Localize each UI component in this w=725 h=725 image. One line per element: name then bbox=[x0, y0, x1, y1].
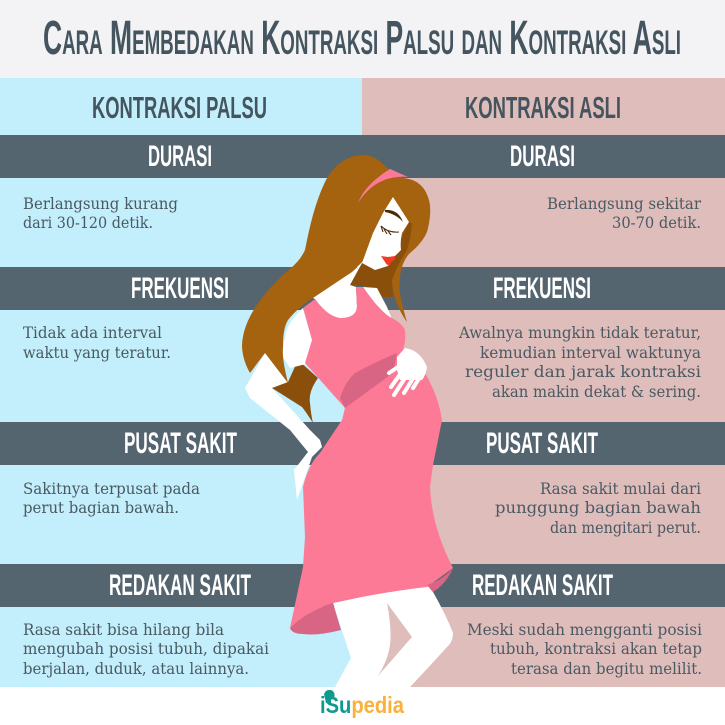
gap between legs bbox=[378, 603, 412, 676]
section band: redakan sakit: REDAKAN SAKIT bbox=[472, 569, 613, 602]
section band: redakan sakit bbox=[0, 564, 725, 607]
text: asli pusat sakit: dan mengitari perut. bbox=[550, 519, 701, 537]
text: asli pusat sakit bbox=[495, 480, 701, 537]
dress hem shadow left bbox=[290, 603, 341, 634]
section band: pusat sakit: PUSAT SAKIT bbox=[124, 427, 237, 460]
dress bbox=[290, 287, 453, 628]
text: asli pusat sakit: punggung bagian bawah bbox=[495, 499, 701, 517]
text: asli redakan sakit bbox=[467, 621, 702, 678]
section band: frekuensi: FREKUENSI bbox=[131, 272, 229, 305]
face bbox=[362, 197, 409, 270]
legs bbox=[333, 585, 453, 687]
panel: kontraksi palsu background bbox=[0, 78, 362, 687]
section band: pusat sakit: PUSAT SAKIT bbox=[486, 427, 598, 460]
text: asli frekuensi bbox=[458, 324, 701, 401]
lower left arm and hand bbox=[245, 353, 322, 500]
text: palsu pusat sakit: perut bagian bawah. bbox=[23, 499, 179, 517]
panel: kontraksi asli background bbox=[362, 78, 725, 687]
text: palsu pusat sakit bbox=[23, 480, 200, 517]
text: asli frekuensi: Awalnya mungkin tidak teratur, bbox=[458, 324, 701, 342]
text: palsu redakan sakit: Rasa sakit bisa hilang bila bbox=[23, 621, 224, 639]
dark sleeve hair bbox=[272, 360, 318, 423]
illustration: pregnant woman bbox=[242, 155, 453, 687]
section band: durasi: DURASI bbox=[148, 140, 212, 173]
text: asli durasi bbox=[547, 195, 702, 232]
logo: isupedia bbox=[320, 690, 404, 718]
text: asli redakan sakit: Meski sudah mengganti posisi bbox=[467, 621, 702, 639]
long hair bbox=[242, 155, 430, 383]
right chest skin bbox=[363, 287, 392, 319]
text: palsu redakan sakit: berjalan, duduk, atau lainnya. bbox=[23, 660, 249, 678]
text: asli durasi: Berlangsung sekitar bbox=[547, 195, 702, 213]
text: asli durasi: 30-70 detik. bbox=[612, 214, 701, 232]
section band: frekuensi: FREKUENSI bbox=[493, 272, 591, 305]
dress hem shadow right bbox=[427, 568, 453, 592]
eyebrow bbox=[385, 210, 403, 222]
lips bbox=[381, 256, 395, 265]
eyelash bbox=[381, 226, 399, 235]
text: asli frekuensi: kemudian interval waktunya bbox=[480, 344, 701, 362]
text: palsu frekuensi bbox=[23, 324, 171, 362]
section band: durasi bbox=[0, 135, 725, 178]
text: palsu redakan sakit: mengubah posisi tubuh, dipakai bbox=[23, 640, 269, 658]
hand on belly bbox=[389, 348, 427, 395]
text: asli frekuensi: akan makin dekat & sering. bbox=[492, 383, 701, 401]
column heading: kontraksi palsu: KONTRAKSI PALSU bbox=[92, 90, 267, 125]
text: asli frekuensi: reguler dan jarak kontraksi bbox=[465, 363, 701, 381]
shoulder bbox=[283, 308, 312, 368]
text: palsu frekuensi: waktu yang teratur. bbox=[23, 344, 171, 362]
section band: durasi: DURASI bbox=[510, 140, 575, 173]
text: palsu durasi: dari 30-120 detik. bbox=[23, 214, 153, 232]
logo icon: head bbox=[324, 690, 335, 704]
text: palsu durasi: Berlangsung kurang bbox=[23, 195, 178, 213]
text: palsu redakan sakit bbox=[23, 621, 269, 678]
neck and chest bbox=[313, 263, 362, 318]
section band: pusat sakit bbox=[0, 422, 725, 465]
section band: redakan sakit: REDAKAN SAKIT bbox=[109, 569, 251, 602]
text: asli redakan sakit: terasa dan begitu melilit. bbox=[511, 660, 702, 678]
title banner bbox=[0, 0, 725, 78]
logo wordmark: iSupedia bbox=[320, 692, 404, 718]
text: asli redakan sakit: tubuh, kontraksi akan tetap bbox=[490, 640, 702, 658]
text: asli pusat sakit: Rasa sakit mulai dari bbox=[540, 480, 701, 498]
dress belt shadow bbox=[340, 353, 397, 408]
section band: frekuensi bbox=[0, 267, 725, 310]
headband bbox=[358, 169, 408, 203]
text: palsu durasi bbox=[23, 195, 178, 232]
column heading: kontraksi asli: KONTRAKSI ASLI bbox=[465, 90, 621, 125]
dark hair behind neck bbox=[350, 222, 412, 297]
text: palsu pusat sakit: Sakitnya terpusat pada bbox=[23, 480, 200, 498]
text: palsu frekuensi: Tidak ada interval bbox=[23, 324, 162, 342]
